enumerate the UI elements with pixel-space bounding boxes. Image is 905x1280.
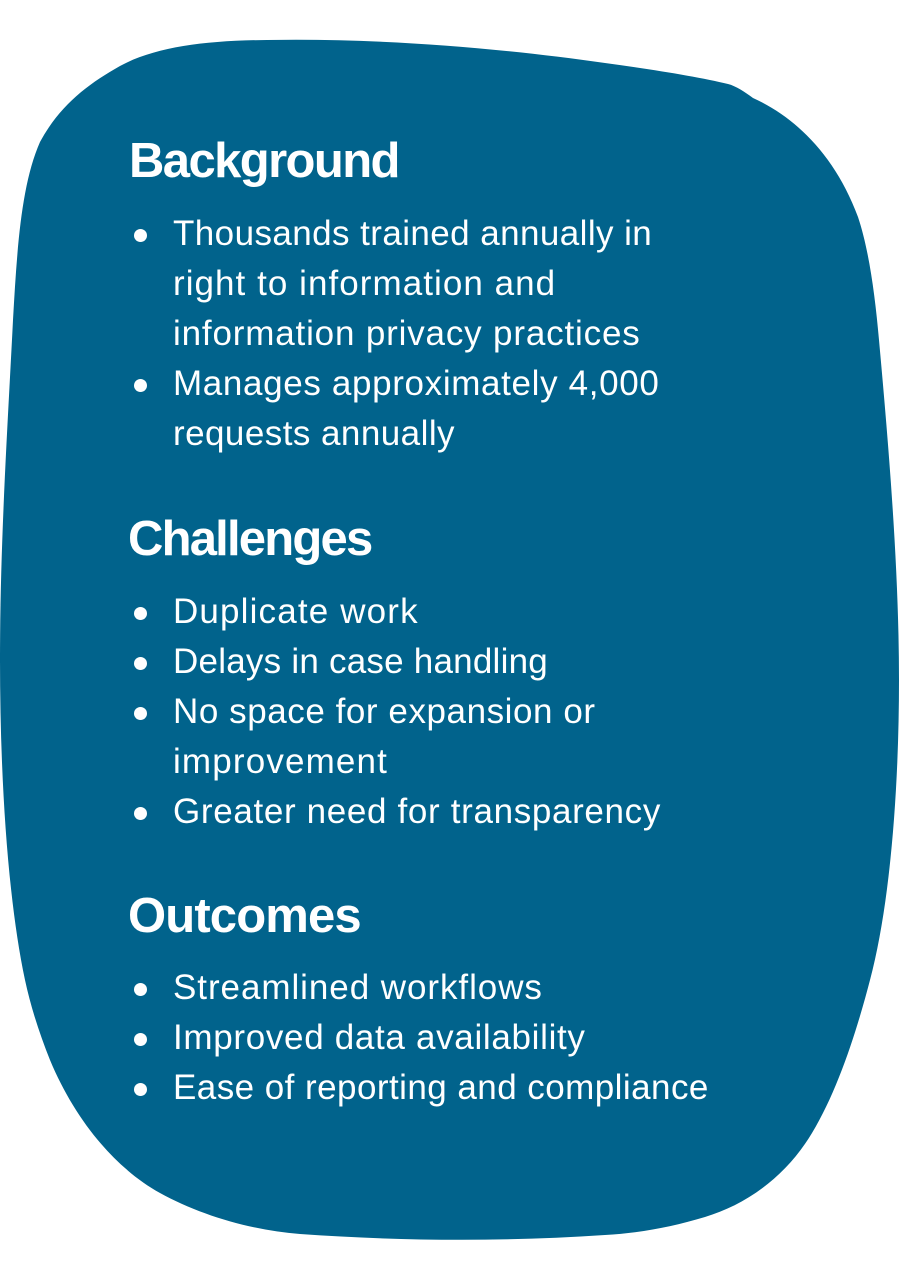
bullet list: background: Manages approximately 4,000 — [173, 364, 659, 403]
bullet list: background — [134, 214, 659, 453]
bullet list: challenges: improvement — [173, 742, 388, 781]
panel: challenges — [128, 512, 661, 831]
bullet list: background: information privacy practices — [173, 314, 641, 353]
panel: background — [129, 134, 659, 453]
bullet list: challenges: Greater need for transparency — [173, 792, 661, 831]
heading: Background: Background — [129, 134, 399, 188]
bullet list: challenges — [134, 592, 661, 831]
bullet list: challenges: No space for expansion or — [173, 692, 596, 731]
bullet list: background: Thousands trained annually in — [173, 214, 652, 253]
bullet list: outcomes: Streamlined workflows — [173, 968, 543, 1007]
bullet list: outcomes — [134, 968, 709, 1107]
bullet list: outcomes: Ease of reporting and compliance — [173, 1068, 709, 1107]
bullet list: challenges: Duplicate work — [173, 592, 419, 631]
heading: Outcomes: Outcomes — [128, 889, 361, 943]
panel: outcomes — [128, 889, 709, 1107]
bullet list: background: requests annually — [173, 414, 455, 453]
bullet list: background: right to information and — [173, 264, 556, 303]
heading: Challenges: Challenges — [128, 512, 371, 566]
bullet list: outcomes: Improved data availability — [173, 1018, 586, 1057]
bullet list: challenges: Delays in case handling — [173, 642, 548, 681]
